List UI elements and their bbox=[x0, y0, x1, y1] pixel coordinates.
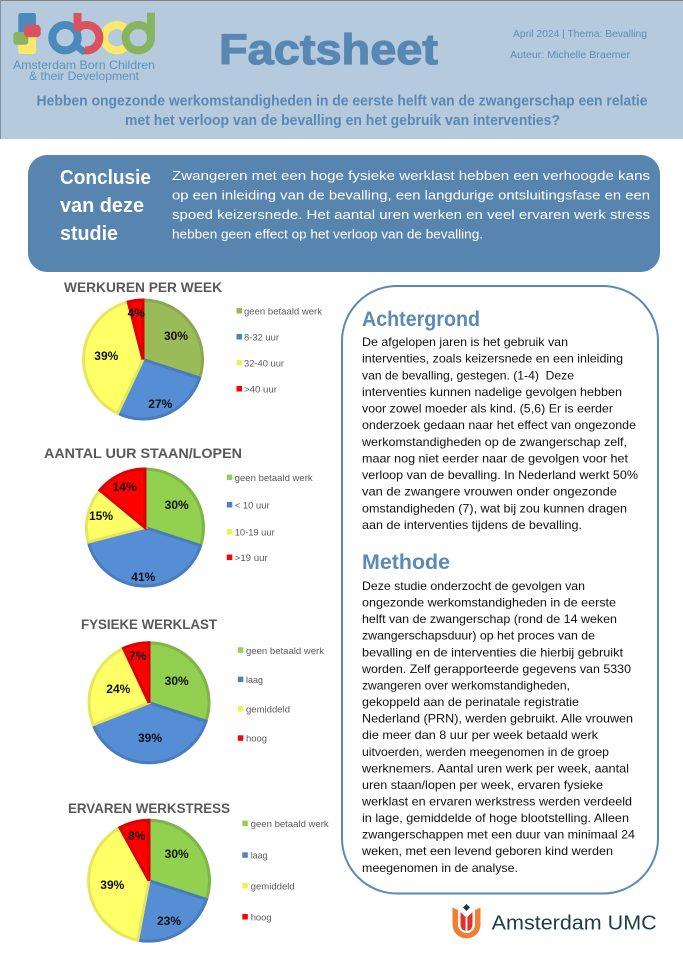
conclusion heading: van deze bbox=[60, 195, 144, 217]
research question bbox=[36, 92, 648, 129]
pie values: 15% bbox=[89, 509, 113, 523]
chart: ervaren werkstress bbox=[68, 800, 329, 941]
text block: Achtergrond: verloop van de bevalling. In Nederland werkt 50% bbox=[362, 468, 638, 482]
text block: Achtergrond: interventies, zoals keizersnede en een inleiding bbox=[362, 352, 623, 366]
conclusion text: spoed keizersnede. Het aantal uren werken en veel ervaren werk stress bbox=[172, 207, 650, 222]
text block: Methode: ongezonde werkomstandigheden in de eerste bbox=[362, 596, 616, 610]
pie bbox=[89, 643, 209, 763]
text block: Methode: meegenomen in de analyse. bbox=[362, 861, 518, 875]
pie values: 14% bbox=[113, 480, 137, 494]
pie values bbox=[89, 480, 189, 584]
chart: aantal uur staan/lopen bbox=[44, 445, 313, 586]
text block: Methode: uitvoerden, werden meegenomen in de groep bbox=[362, 745, 609, 759]
text block: Methode: uren staan/lopen per week, ervaren fysieke bbox=[362, 778, 603, 792]
logo: Amsterdam UMC: Amsterdam UMC bbox=[492, 912, 657, 934]
logo: Amsterdam Born Children and their Development bbox=[13, 13, 155, 83]
pie values: 27% bbox=[148, 397, 173, 411]
legend: 8-32 uur bbox=[244, 332, 279, 344]
research question: met het verloop van de bevalling en het gebruik van interventies? bbox=[125, 112, 560, 129]
pie values: 24% bbox=[106, 682, 131, 696]
conclusion text: hebben geen effect op het verloop van de bevalling. bbox=[172, 226, 483, 242]
text block: Achtergrond: werkomstandigheden op de zwangerschap zelf, bbox=[361, 435, 627, 449]
pie bbox=[84, 300, 203, 419]
legend: laag bbox=[251, 851, 268, 862]
research question: Hebben ongezonde werkomstandigheden in de eerste helft van de zwangerschap een relatie bbox=[36, 92, 648, 110]
pie bbox=[89, 820, 209, 941]
text block: Achtergrond: onderzoek gedaan naar het effect van ongezonde bbox=[362, 418, 636, 432]
legend: hoog bbox=[246, 734, 267, 745]
legend: laag bbox=[246, 675, 263, 686]
author: Auteur: Michelle Braemer bbox=[510, 49, 631, 61]
legend: geen betaald werk bbox=[246, 646, 324, 657]
pie values: 39% bbox=[138, 731, 162, 745]
text block: Achtergrond: De afgelopen jaren is het gebruik van bbox=[362, 335, 568, 349]
text block: Methode: zwangerschapsduur) op het proces van de bbox=[362, 629, 595, 643]
panel: background and method bbox=[342, 286, 658, 894]
chart title: WERKUREN PER WEEK bbox=[64, 279, 222, 295]
text block: Methode bbox=[361, 579, 635, 875]
text block: Achtergrond: interventies kunnen nadelige gevolgen hebben bbox=[362, 385, 622, 399]
pie values: 7% bbox=[129, 649, 147, 663]
legend: geen betaald werk bbox=[244, 306, 322, 318]
pie values: 4% bbox=[128, 306, 145, 320]
text block: Methode: zwangeren over werkomstandigheden, bbox=[362, 678, 570, 692]
text block: Methode: in lage, gemiddelde of hoge blootstelling. Alleen bbox=[362, 811, 629, 825]
text block: Achtergrond bbox=[361, 335, 638, 532]
legend: geen betaald werk bbox=[235, 473, 313, 484]
text block: Methode: werklast en ervaren werkstress werden verdeeld bbox=[361, 794, 632, 808]
legend: gemiddeld bbox=[246, 704, 290, 715]
pie values bbox=[94, 306, 188, 411]
text block: Methode: die meer dan 8 uur per week betaald werk bbox=[362, 728, 599, 742]
conclusion text: op een inleiding van de bevalling, een langdurige ontsluitingsfase en een bbox=[172, 188, 650, 202]
chart: fysieke werklast bbox=[81, 616, 324, 763]
title: Factsheet bbox=[219, 26, 438, 74]
legend: 32-40 uur bbox=[244, 358, 284, 370]
pie values: 23% bbox=[157, 914, 181, 928]
text block: Methode: Nederland (PRN), werden gebruikt. Alle vrouwen bbox=[362, 712, 633, 726]
legend bbox=[227, 473, 313, 564]
pie values: 39% bbox=[94, 349, 119, 363]
pie values: 39% bbox=[100, 878, 125, 892]
text block: Achtergrond: voor zowel moeder als kind. (5,6) Er is eerder bbox=[362, 402, 613, 416]
text block: Achtergrond: omstandigheden (7), wat bij zou kunnen dragen bbox=[362, 501, 627, 515]
date and theme: April 2024 | Thema: Bevalling bbox=[513, 28, 647, 40]
text block: Methode: werknemers. Aantal uren werk per week, aantal bbox=[361, 761, 629, 775]
header band bbox=[0, 0, 683, 139]
logo: Amsterdam Born Children and their Development: Amsterdam Born Children bbox=[13, 58, 155, 72]
legend: geen betaald werk bbox=[251, 819, 329, 830]
chart title: AANTAL UUR STAAN/LOPEN bbox=[44, 445, 242, 461]
pie values: 8% bbox=[128, 829, 146, 843]
pie values: 30% bbox=[165, 674, 189, 688]
text block: Methode: gekoppeld aan de perinatale registratie bbox=[362, 695, 579, 709]
legend: gemiddeld bbox=[251, 881, 295, 892]
heading: Achtergrond: Achtergrond bbox=[362, 308, 480, 331]
panel: conclusion bbox=[28, 155, 660, 272]
text block: Achtergrond: van de zwangere vrouwen onder ongezonde bbox=[362, 485, 617, 499]
pie values: 30% bbox=[165, 498, 189, 512]
text block: Achtergrond: maar nog niet eerder naar de gevolgen voor het bbox=[362, 451, 629, 465]
pie values bbox=[106, 649, 189, 745]
legend: hoog bbox=[251, 912, 272, 923]
legend bbox=[236, 306, 322, 396]
logo: Amsterdam UMC bbox=[452, 904, 657, 939]
pie values: 30% bbox=[164, 329, 188, 343]
text block: Methode: helft van de zwangerschap (rond de 14 weken bbox=[362, 612, 617, 626]
conclusion text bbox=[172, 168, 650, 242]
text block: Methode: worden. Zelf gerapporteerde gegevens van 5330 bbox=[361, 662, 631, 676]
chart: werkuren per week bbox=[64, 279, 322, 419]
legend: >40 uur bbox=[244, 384, 277, 396]
text block: Achtergrond: van de bevalling, gestegen. (1-4) Deze bbox=[362, 368, 574, 382]
text block: Methode: Deze studie onderzocht de gevolgen van bbox=[362, 579, 585, 593]
conclusion heading: studie bbox=[60, 223, 118, 245]
legend: 10-19 uur bbox=[235, 527, 275, 538]
conclusion text: Zwangeren met een hoge fysieke werklast hebben een verhoogde kans bbox=[172, 168, 650, 183]
logo: Amsterdam Born Children and their Development: & their Development bbox=[29, 69, 140, 83]
text block: Methode: zwangerschappen met een duur van minimaal 24 bbox=[362, 828, 635, 842]
legend bbox=[238, 646, 324, 745]
text block: Methode: weken, met een levend geboren kind werden bbox=[361, 844, 613, 858]
legend: < 10 uur bbox=[235, 500, 270, 511]
legend: >19 uur bbox=[235, 553, 268, 564]
pie values: 41% bbox=[131, 570, 156, 584]
chart title: ERVAREN WERKSTRESS bbox=[68, 800, 230, 816]
pie values bbox=[100, 829, 189, 928]
chart title: FYSIEKE WERKLAST bbox=[81, 616, 217, 632]
legend bbox=[242, 819, 329, 923]
conclusion heading: Conclusie bbox=[60, 167, 151, 189]
text block: Methode: bevalling en de interventies die hierbij gebruikt bbox=[362, 645, 624, 659]
pie values: 30% bbox=[165, 847, 189, 861]
pie bbox=[86, 469, 203, 586]
text block: Achtergrond: aan de interventies tijdens de bevalling. bbox=[362, 518, 582, 532]
conclusion heading bbox=[60, 167, 151, 245]
heading: Methode: Methode bbox=[362, 551, 450, 574]
